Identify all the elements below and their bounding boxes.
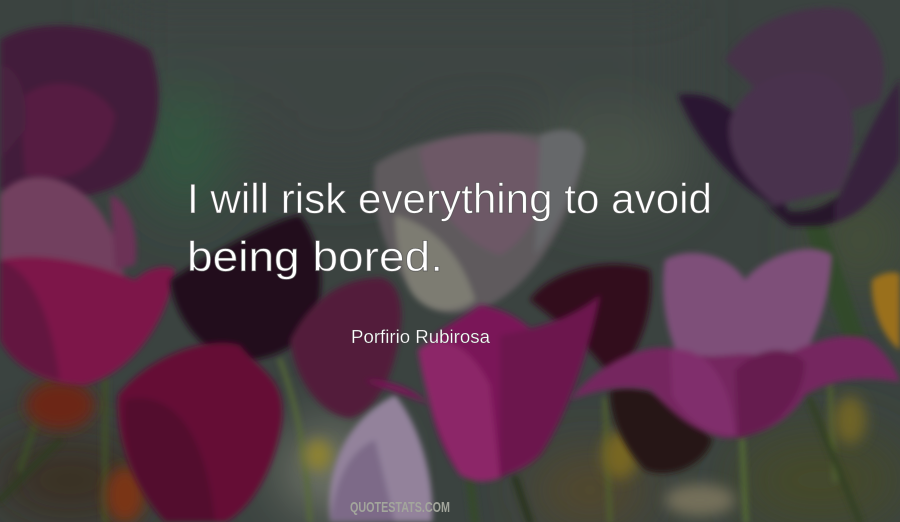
tulip: pale bottom (329, 395, 432, 522)
quote text (187, 175, 712, 280)
tulip: centre magenta (365, 295, 600, 481)
tulip: left magenta (0, 177, 175, 385)
tulip: centre white (374, 130, 585, 313)
quote text: being bored. (187, 233, 443, 280)
stems and foliage (0, 225, 860, 522)
quote text: I will risk everything to avoid (187, 175, 712, 222)
author: Porfirio Rubirosa (351, 327, 491, 347)
tulip: top left dark purple (0, 26, 159, 198)
watermark: QUOTESTATS.COM (350, 499, 450, 516)
tulip: top right purple (678, 8, 900, 226)
tulip: plum centre (290, 278, 401, 418)
tulip: dark red right of centre (530, 264, 712, 473)
tulip: dark centre-left (170, 215, 321, 361)
warm bottom accents (25, 380, 866, 522)
orange tulip edge (872, 273, 900, 350)
tulip: bottom left crimson (118, 342, 282, 522)
tulip: right pink (570, 249, 900, 438)
